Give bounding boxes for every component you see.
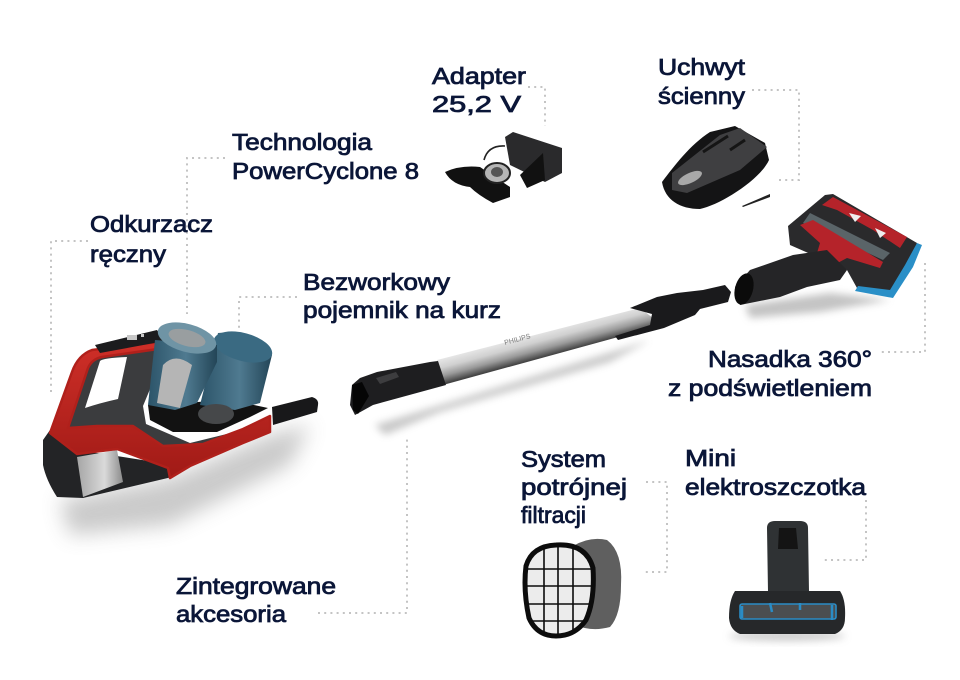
label: Uchwyt scienny [658, 54, 746, 109]
tube connector [272, 397, 318, 425]
label: Zintegrowane akcesoria: akcesoria [176, 601, 286, 627]
dotted leader: filtration [642, 482, 667, 572]
label: Technologia PowerCyclone 8: Technologia [232, 129, 372, 155]
label: Adapter 25,2 V: Adapter [432, 63, 526, 89]
dotted leader: integrated accessories [318, 438, 407, 613]
label: Odkurzacz reczny [90, 211, 213, 267]
label: Odkurzacz reczny: Odkurzacz [90, 211, 213, 237]
mount slots [703, 136, 745, 152]
tube shadow [375, 340, 650, 435]
neck socket [778, 528, 798, 549]
wall mount [662, 126, 770, 209]
blue bristle edge [855, 243, 922, 298]
hand vacuum [43, 317, 318, 535]
label: Adapter 25,2 V [432, 63, 526, 117]
dark grey handle and bay [58, 342, 270, 465]
dust bin front [148, 340, 217, 410]
mount screw [742, 194, 770, 207]
head body [788, 194, 917, 296]
label: Bezworkowy pojemnik na kurz: pojemnik na kurz [303, 297, 501, 323]
red neck [800, 220, 883, 268]
cord coil [445, 167, 510, 203]
label: Bezworkowy pojemnik na kurz [303, 269, 501, 323]
dotted leader: dust container [239, 297, 297, 328]
mini brush [729, 521, 845, 641]
filter [525, 539, 621, 636]
grey foam filter [573, 539, 621, 629]
brush shadow [729, 631, 845, 641]
label: System potrojnej filtracji: potrójnej [521, 474, 627, 500]
dust bin rear lid [210, 326, 276, 368]
display digits [127, 334, 144, 340]
dotted leader: 360 nozzle [880, 263, 925, 352]
motor housing [43, 430, 172, 498]
filter frame with grid [525, 544, 594, 636]
dotted leader: mini brush [821, 500, 866, 560]
mount top face [672, 128, 767, 193]
label: Nasadka 360 z podswietleniem: Nasadka 360° [708, 346, 872, 372]
label: System potrojnej filtracji [521, 446, 627, 528]
adapter [445, 132, 562, 203]
panel triangles [849, 213, 886, 238]
label: Mini elektroszczotka [685, 445, 866, 500]
label: Mini elektroszczotka: Mini [685, 445, 736, 471]
dotted leader: wall mount [752, 90, 799, 180]
tube opening [352, 382, 369, 414]
label: Technologia PowerCyclone 8: PowerCyclone 8 [232, 158, 419, 184]
label: Nasadka 360 z podswietleniem: z podświetleniem [668, 375, 872, 401]
round plug [484, 163, 510, 183]
handle opening [85, 357, 127, 408]
label: Zintegrowane akcesoria [176, 573, 336, 627]
release button [376, 372, 399, 384]
mount body [662, 126, 769, 209]
cyclone cone [157, 358, 192, 408]
front coupling [350, 361, 446, 415]
cord loop [484, 146, 505, 160]
top display panel [95, 330, 165, 353]
vacuum shadow [60, 425, 310, 535]
label: Adapter 25,2 V: 25,2 V [432, 91, 522, 117]
extension tube [350, 285, 731, 435]
brush roll [740, 604, 836, 619]
dotted leader: PowerCyclone [187, 158, 225, 314]
blue bristle [742, 603, 832, 620]
metal band [77, 450, 123, 497]
label: System potrojnej filtracji: System [521, 446, 606, 472]
label: Zintegrowane akcesoria: Zintegrowane [176, 573, 336, 599]
label: System potrojnej filtracji: filtracji [521, 502, 586, 528]
neck tube [735, 250, 847, 305]
charger pins [520, 153, 545, 188]
dotted leader: hand vacuum [51, 241, 88, 396]
mount clip [676, 168, 704, 188]
black cyclone base [148, 400, 268, 432]
label: Uchwyt scienny: Uchwyt [658, 54, 746, 80]
philips mark: PHILIPS [504, 333, 532, 347]
nozzle shadow [745, 293, 890, 318]
red handle and base [50, 341, 270, 478]
label: Technologia PowerCyclone 8 [232, 129, 419, 184]
dotted leader: adapter [528, 87, 545, 126]
label: Odkurzacz reczny: ręczny [90, 241, 167, 267]
label: Uchwyt scienny: ścienny [658, 83, 746, 109]
neck opening [731, 271, 757, 307]
dust bin rear [200, 333, 272, 410]
label: Mini elektroszczotka: elektroszczotka [685, 474, 866, 500]
label: Bezworkowy pojemnik na kurz: Bezworkowy [303, 269, 451, 295]
360 nozzle [731, 194, 922, 318]
brush neck [767, 521, 809, 592]
brush head [729, 591, 845, 634]
second cyclone stand [198, 404, 234, 424]
dust bin front cap [154, 317, 220, 359]
rear coupling [615, 285, 731, 340]
silver tube [437, 308, 662, 385]
label: Nasadka 360 z podswietleniem [668, 346, 872, 401]
brush roll [803, 213, 890, 260]
charger box [505, 132, 562, 182]
red panel [822, 197, 907, 248]
